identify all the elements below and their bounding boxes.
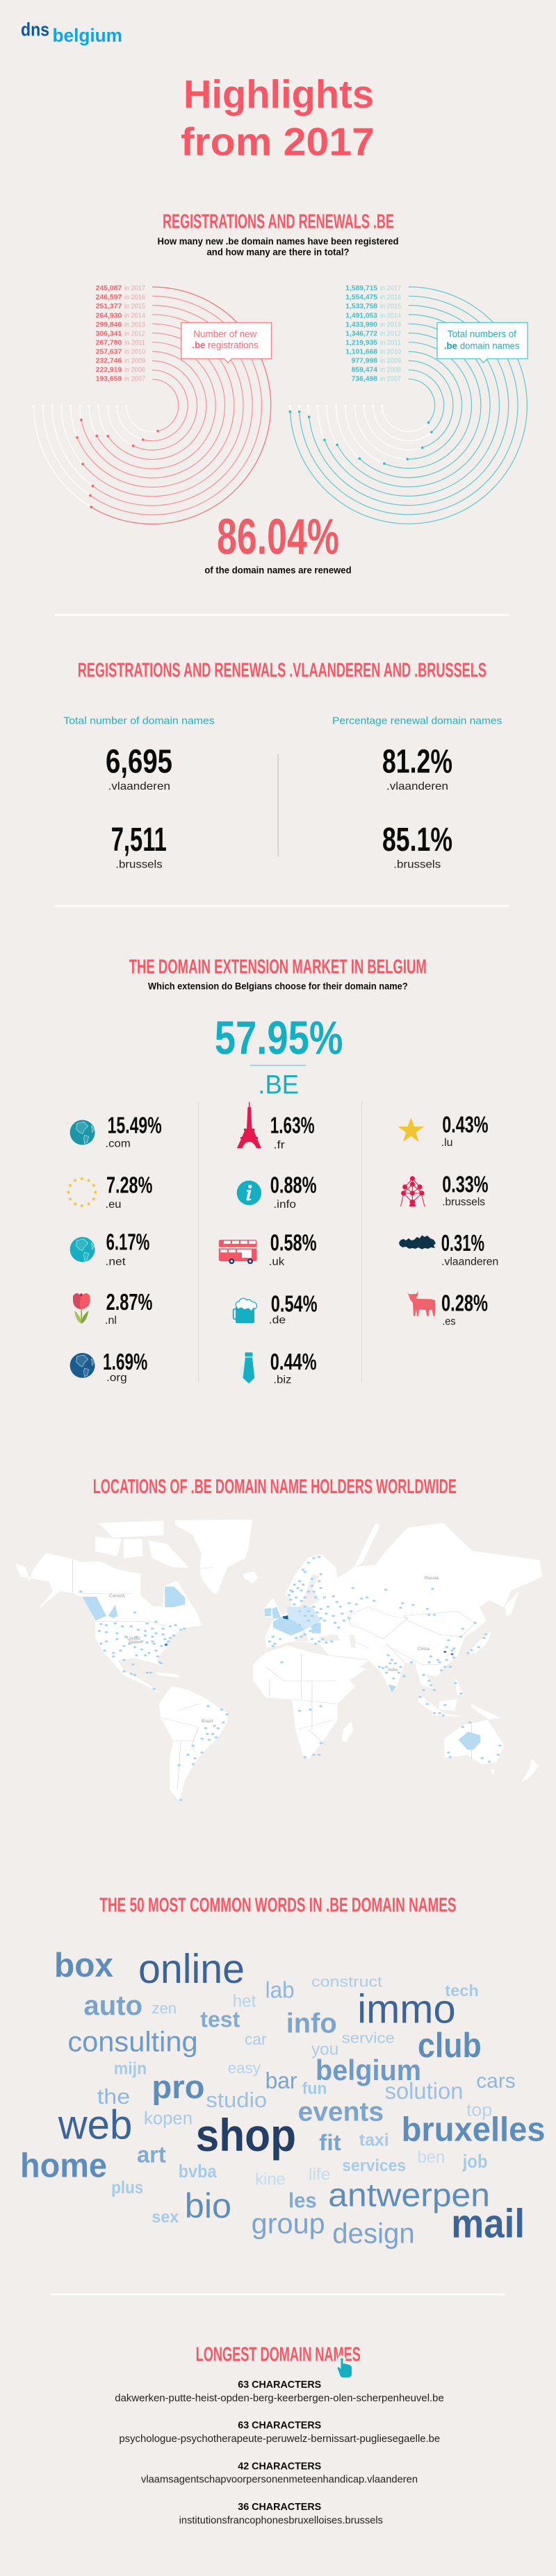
item: .eu: .eu	[106, 1199, 121, 1211]
year labels: 1,101,668	[345, 348, 377, 356]
item: .vlaanderen	[399, 1230, 498, 1268]
year labels: in 2010	[124, 348, 145, 356]
word cloud: zen	[152, 2000, 177, 2017]
item: .es	[407, 1290, 488, 1327]
item: .uk: .uk	[269, 1256, 284, 1268]
year labels: 859,474	[352, 367, 377, 374]
column: total number of domain names: .brussels	[115, 858, 163, 870]
word cloud: kine	[255, 2170, 286, 2189]
title	[181, 72, 375, 164]
word cloud: studio	[206, 2088, 267, 2112]
word cloud: immo	[357, 1986, 456, 2031]
map labels: China	[418, 1647, 430, 1652]
world map	[15, 1520, 542, 1800]
year labels: 1,219,935	[345, 339, 377, 347]
word cloud: antwerpen	[328, 2177, 490, 2213]
item: .brussels	[400, 1172, 489, 1208]
year labels: in 2014	[124, 312, 145, 319]
icon: tulip	[73, 1293, 90, 1324]
word cloud: job	[462, 2151, 488, 2172]
entry: psychologue: 63 CHARACTERS	[238, 2420, 321, 2432]
callout: number of new .be registrations: Number of new	[193, 328, 257, 339]
column: percentage renewal domain names: 85.1%	[382, 822, 452, 858]
question text: How many new .be domain names have been registered	[157, 236, 399, 247]
entry: vlaamsagentschap: vlaamsagentschapvoorpersonenmeteenhandicap.vlaanderen	[141, 2475, 418, 2486]
callout: total numbers of .be domain names: domain names	[460, 340, 519, 351]
item: .biz: .biz	[273, 1374, 291, 1386]
year labels: in 2007	[380, 376, 401, 383]
column: total number of domain names: Total number of domain names	[63, 715, 215, 727]
unfilled white arcs	[33, 406, 158, 507]
year labels: in 2014	[380, 312, 401, 319]
column: percentage renewal domain names: Percentage renewal domain names	[332, 715, 502, 727]
icon: double decker bus	[219, 1240, 256, 1264]
icon: pointing hand	[338, 2355, 352, 2377]
item: .vlaanderen: .vlaanderen	[441, 1256, 498, 1268]
big stat: 57.95% .be: .BE	[258, 1070, 299, 1099]
year labels: 257,637	[96, 348, 122, 356]
word cloud: mail	[451, 2202, 525, 2247]
panel: locations of .be domain name holders worldwide	[15, 1476, 542, 1800]
word cloud: les	[288, 2188, 317, 2212]
word cloud: construct	[311, 1975, 382, 1991]
question text: Which extension do Belgians choose for their domain name?	[148, 981, 408, 991]
callout: number of new .be registrations: .be	[192, 339, 205, 350]
map labels: Brazil	[202, 1719, 213, 1724]
icon: info circle	[237, 1181, 261, 1205]
item: .net: 6.17%	[106, 1229, 149, 1254]
year labels: in 2011	[380, 339, 401, 347]
year labels: 246,597	[96, 294, 122, 301]
year labels: in 2013	[124, 321, 145, 329]
word cloud: taxi	[359, 2131, 389, 2150]
word cloud: shop	[196, 2109, 296, 2161]
item: .de	[234, 1291, 318, 1326]
word cloud: the	[97, 2084, 130, 2109]
item: .lu: 0.43%	[442, 1112, 489, 1138]
item: .vlaanderen: 0.31%	[441, 1230, 484, 1256]
callout: total numbers of .be domain names: Total numbers of	[448, 328, 516, 339]
coloured arcs	[290, 287, 527, 524]
entry: vlaamsagentschap	[141, 2460, 418, 2486]
word cloud: club	[418, 2026, 482, 2065]
word cloud: life	[309, 2166, 331, 2184]
white arc end dots	[33, 405, 127, 408]
callout: total numbers of .be domain names	[437, 322, 528, 363]
item: .info	[237, 1172, 317, 1211]
word cloud: easy	[228, 2059, 261, 2077]
word cloud: auto	[83, 1991, 142, 2021]
word cloud: art	[137, 2142, 166, 2167]
coloured arc end dots	[289, 410, 433, 465]
icon: necktie	[240, 1352, 254, 1383]
item: .org	[70, 1349, 147, 1383]
big stat: 86.04% renewed: of the domain names are renewed	[204, 565, 352, 576]
icon: flanders map	[399, 1235, 436, 1249]
year labels: 736,498	[352, 376, 377, 383]
word cloud	[20, 1946, 546, 2249]
item: .uk	[219, 1230, 317, 1268]
word cloud: lab	[265, 1977, 295, 2003]
year labels: in 2010	[380, 348, 401, 356]
word cloud: test	[200, 2007, 240, 2032]
year labels	[345, 285, 401, 383]
word cloud: group	[252, 2208, 325, 2240]
item: .nl	[73, 1289, 152, 1327]
year labels: 245,087	[96, 285, 122, 292]
icon: star	[398, 1117, 424, 1142]
panel: registrations and renewals .be	[33, 210, 528, 576]
year labels: 977,998	[352, 357, 377, 365]
item: .nl: 2.87%	[106, 1289, 152, 1315]
year labels: in 2017	[380, 285, 401, 292]
year labels: in 2009	[380, 357, 401, 365]
year labels: 1,491,053	[345, 312, 377, 319]
word cloud: events	[298, 2097, 384, 2127]
icon: atomium	[400, 1176, 425, 1206]
year labels: 1,346,772	[345, 330, 377, 338]
word cloud: belgium	[316, 2054, 421, 2086]
logo: dns belgium	[21, 19, 122, 46]
year labels: in 2015	[380, 303, 401, 310]
item: .info: .info	[273, 1199, 296, 1211]
word cloud: bruxelles	[402, 2111, 546, 2149]
title: Highlights	[183, 72, 374, 117]
panel: registrations and renewals .vlaanderen and .brussels	[63, 660, 502, 870]
word cloud: tech	[445, 1981, 479, 2000]
heading: REGISTRATIONS AND RENEWALS .BE	[163, 210, 394, 233]
year labels: in 2012	[380, 330, 401, 338]
item: .brussels: 0.33%	[442, 1172, 489, 1197]
year labels: in 2008	[380, 367, 401, 374]
map labels	[109, 1576, 439, 1724]
column: percentage renewal domain names	[332, 715, 502, 870]
year labels: in 2013	[380, 321, 401, 329]
callout: number of new .be registrations: registrations	[208, 339, 259, 350]
word cloud: home	[20, 2147, 107, 2184]
year labels: in 2015	[124, 303, 145, 310]
year labels: 267,780	[96, 339, 122, 347]
entry: vlaamsagentschap: 42 CHARACTERS	[238, 2460, 321, 2472]
panel: longest domain names	[115, 2343, 444, 2526]
word cloud: pro	[152, 2068, 204, 2105]
year labels: 222,919	[96, 367, 122, 374]
word cloud: bvba	[179, 2161, 217, 2182]
column: percentage renewal domain names: 81.2%	[382, 744, 452, 781]
item: .org: .org	[106, 1372, 127, 1383]
item: .org: 1.69%	[103, 1349, 147, 1374]
year labels: in 2016	[380, 294, 401, 301]
callout: total numbers of .be domain names: .be	[444, 340, 457, 351]
year labels: 251,377	[96, 303, 122, 310]
year labels: 264,930	[96, 312, 122, 319]
item: .biz: 0.44%	[270, 1349, 317, 1374]
column: total number of domain names	[63, 715, 215, 870]
year labels: 299,846	[96, 321, 122, 329]
word cloud: consulting	[67, 2025, 198, 2057]
word cloud: bar	[265, 2068, 297, 2093]
icon: eiffel tower	[237, 1102, 261, 1148]
item: .es: .es	[442, 1315, 456, 1327]
word cloud: services	[342, 2157, 406, 2175]
chart: total numbers of .be domain names	[288, 285, 528, 524]
entry: institutions	[179, 2501, 383, 2526]
word cloud: fun	[302, 2079, 327, 2098]
icon: globe	[70, 1353, 95, 1378]
item: .com: 15.49%	[108, 1113, 162, 1138]
column: percentage renewal domain names: .vlaanderen	[386, 781, 448, 792]
word cloud: info	[286, 2009, 337, 2039]
word cloud: car	[245, 2030, 267, 2048]
word cloud: plus	[111, 2178, 143, 2197]
panel: the 50 most common words in .be domain names	[20, 1894, 546, 2249]
item: .info: 0.88%	[270, 1172, 317, 1197]
logo: dns belgium: dns	[21, 19, 49, 40]
icon: globe	[70, 1120, 95, 1145]
unfilled white arcs	[290, 406, 432, 463]
callout: number of new .be registrations	[181, 322, 271, 363]
white arc end dots	[288, 405, 384, 408]
word cloud: ben	[417, 2147, 445, 2167]
question text	[157, 236, 399, 258]
word cloud: top	[466, 2099, 492, 2120]
item: .com: .com	[106, 1138, 131, 1150]
icon: globe	[70, 1237, 95, 1262]
title: from 2017	[181, 119, 375, 164]
word cloud: service	[342, 2031, 395, 2047]
year labels: 1,589,715	[345, 285, 377, 292]
year labels: in 2007	[124, 376, 145, 383]
big stat: 86.04% renewed: 86.04%	[217, 510, 339, 565]
item: .fr	[237, 1102, 315, 1151]
logo: dns belgium: belgium	[53, 25, 122, 46]
word cloud: sex	[152, 2208, 179, 2227]
icon: bull	[407, 1290, 435, 1316]
item: .de: 0.54%	[271, 1291, 318, 1317]
entry: institutions: institutionsfrancophonesbruxelloises.brussels	[179, 2515, 383, 2526]
chart: number of new .be registrations	[33, 285, 272, 524]
icon: beer mug	[234, 1299, 257, 1323]
year labels	[96, 285, 145, 383]
item: .lu: .lu	[441, 1137, 453, 1149]
word cloud: online	[138, 1946, 245, 1992]
word cloud: design	[332, 2217, 415, 2249]
item: .fr: 1.63%	[270, 1113, 315, 1138]
entry: dakwerken	[115, 2379, 444, 2404]
big stat: 57.95% .be	[215, 1011, 343, 1099]
year labels: in 2011	[124, 339, 145, 347]
item: .de: .de	[269, 1314, 286, 1326]
word cloud: cars	[476, 2070, 516, 2093]
word cloud: het	[233, 1991, 256, 2011]
year labels: 306,341	[96, 330, 122, 338]
year labels: in 2017	[124, 285, 145, 292]
item: .biz	[240, 1349, 317, 1386]
column: total number of domain names: .vlaanderen	[108, 781, 170, 792]
year labels: in 2008	[124, 367, 145, 374]
coloured arcs	[77, 287, 271, 524]
column: total number of domain names: 6,695	[106, 744, 172, 781]
column: percentage renewal domain names: .brussels	[393, 858, 441, 870]
item: .lu	[398, 1112, 489, 1149]
year labels: 1,433,990	[345, 321, 377, 329]
map labels: Canada	[109, 1593, 125, 1599]
entry: dakwerken: 63 CHARACTERS	[238, 2379, 321, 2391]
word cloud: kopen	[144, 2107, 193, 2128]
item: .es: 0.28%	[441, 1290, 488, 1315]
word cloud: solution	[385, 2078, 463, 2104]
map labels: United	[127, 1636, 140, 1641]
big stat: 57.95% .be: 57.95%	[215, 1011, 343, 1064]
map labels: India	[388, 1668, 398, 1672]
entry: psychologue: psychologue-psychotherapeute-peruwelz-bernissart-pugliesegaelle.be	[119, 2434, 440, 2445]
item: .com	[70, 1113, 162, 1150]
word cloud: mijn	[114, 2059, 147, 2079]
heading: LONGEST DOMAIN NAMES	[196, 2343, 361, 2366]
word cloud: box	[54, 1947, 113, 1984]
year labels: 193,659	[96, 376, 122, 383]
year labels: in 2012	[124, 330, 145, 338]
map labels: Russia	[425, 1576, 439, 1581]
word cloud: bio	[185, 2186, 231, 2225]
item: .brussels: .brussels	[442, 1196, 485, 1208]
year labels: 1,554,475	[345, 294, 377, 301]
coloured arc end dots	[76, 419, 159, 508]
item: .net: .net	[106, 1256, 126, 1268]
year labels: in 2016	[124, 294, 145, 301]
entry: institutions: 36 CHARACTERS	[238, 2501, 321, 2513]
item: .nl: .nl	[105, 1315, 117, 1327]
item: .fr: .fr	[273, 1139, 285, 1151]
item: .eu	[66, 1172, 152, 1211]
entry: psychologue	[119, 2420, 440, 2445]
panel: the domain extension market in belgium	[66, 956, 498, 1386]
year labels: 232,746	[96, 357, 122, 365]
icon: eu stars	[66, 1177, 97, 1208]
big stat: 86.04% renewed	[204, 510, 352, 576]
word cloud: you	[311, 2041, 338, 2059]
word cloud: web	[58, 2102, 132, 2147]
question text: and how many are there in total?	[207, 247, 349, 258]
year labels: in 2009	[124, 357, 145, 365]
item: .net	[70, 1229, 149, 1268]
item: .eu: 7.28%	[106, 1172, 152, 1197]
word cloud: fit	[319, 2130, 341, 2155]
column: total number of domain names: 7,511	[111, 822, 167, 858]
entry: dakwerken: dakwerken-putte-heist-opden-berg-keerbergen-olen-scherpenheuvel.be	[115, 2393, 444, 2404]
map labels: States	[129, 1640, 142, 1645]
item: .uk: 0.58%	[270, 1230, 317, 1256]
year labels: 1,533,758	[345, 303, 377, 310]
